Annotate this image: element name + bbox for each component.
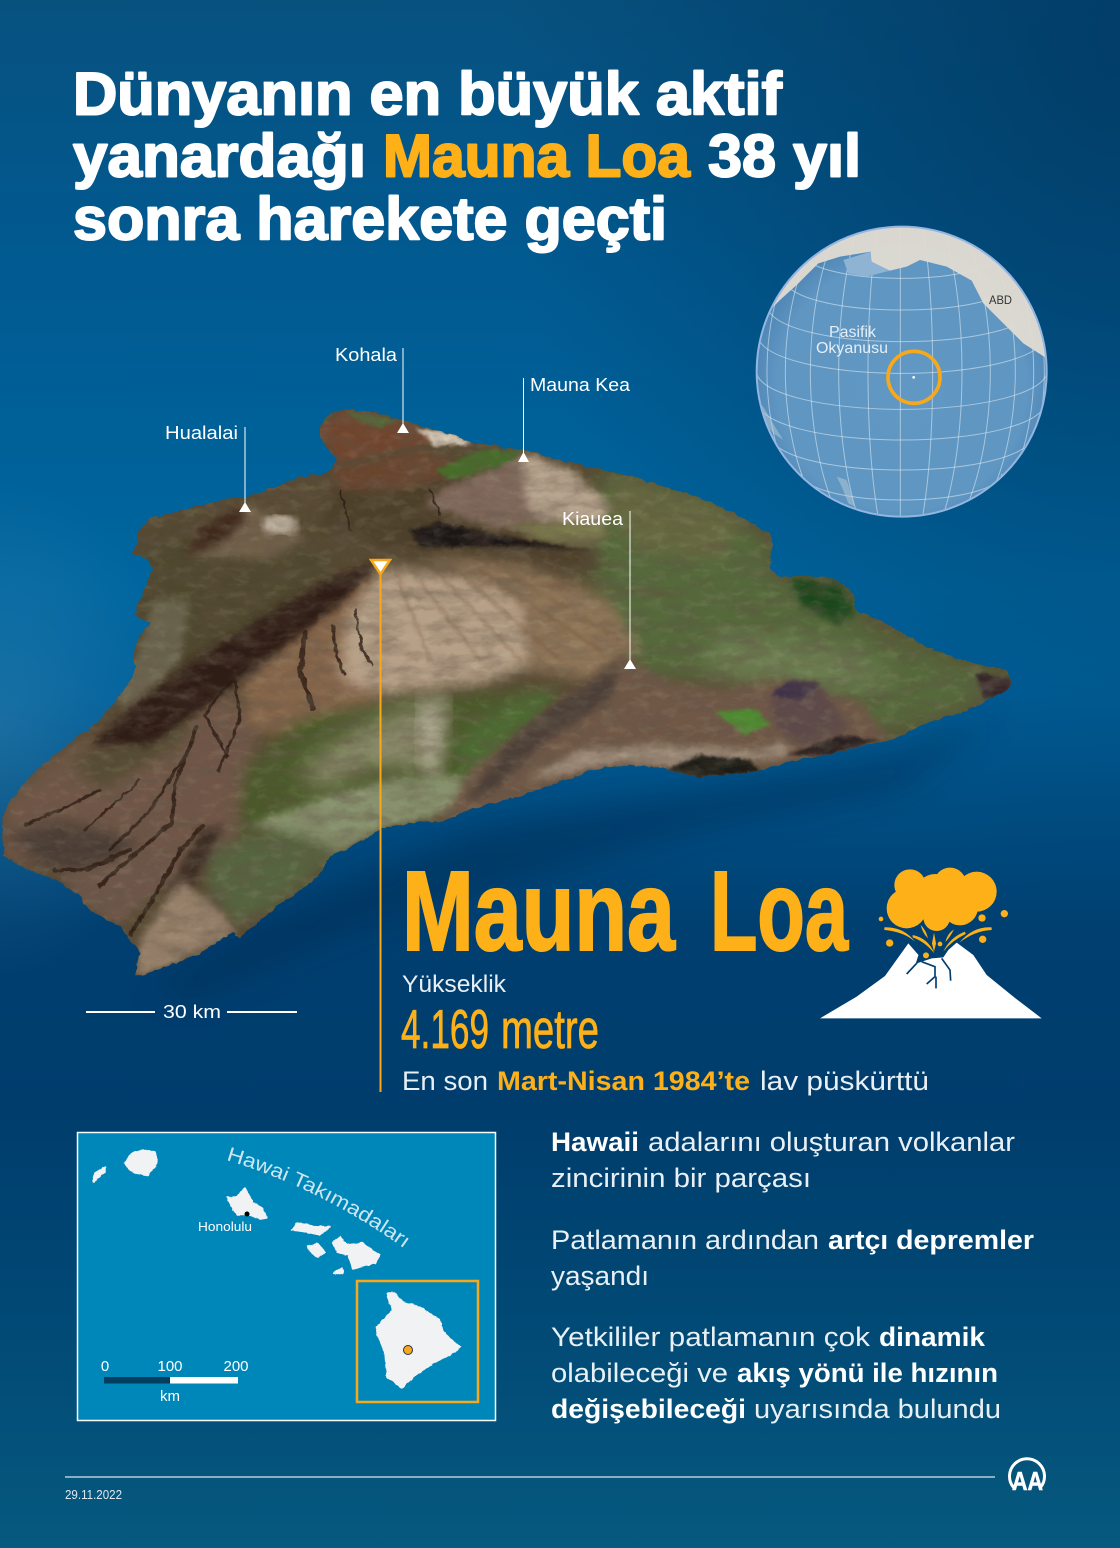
saddle plateau xyxy=(324,480,600,573)
Big Island highlight box xyxy=(357,1281,478,1402)
date: 29.11.2022 xyxy=(65,1488,122,1502)
title: 38 yıl xyxy=(708,122,861,190)
heading: Mauna Loa: Loa xyxy=(710,848,849,974)
dark rainforest xyxy=(790,578,855,625)
last eruption text: lav püskürttü xyxy=(760,1066,929,1096)
title: Dünyanın en büyük aktif xyxy=(73,60,783,128)
label: ABD: ABD xyxy=(989,295,1012,307)
title xyxy=(73,60,861,252)
height value: 4.169 xyxy=(401,998,489,1060)
title: sonra harekete geçti xyxy=(73,186,667,252)
map scale bar: km xyxy=(160,1388,180,1405)
text block: official warning: akış yönü ile hızının xyxy=(737,1358,998,1388)
text block: official warning: değişebileceği xyxy=(551,1394,746,1424)
south tip pale slope xyxy=(135,880,235,977)
height value xyxy=(401,998,599,1060)
scale: 30 km: 30 km xyxy=(163,1002,221,1022)
text block: Hawaii chain: Hawaii xyxy=(551,1127,639,1157)
text block: Hawaii chain: zincirinin bir parçası xyxy=(551,1163,811,1193)
Mauna Kea cone xyxy=(425,452,540,530)
text block: aftershocks xyxy=(551,1225,1035,1291)
height value: metre xyxy=(501,998,599,1060)
3D terrain of Hawaii island xyxy=(2,408,1012,976)
label: Pasifik Okyanusu: Okyanusu xyxy=(816,340,888,357)
label: Pasifik Okyanusu: Pasifik xyxy=(829,324,877,341)
land: southwest Pacific xyxy=(762,406,854,506)
Kohala peninsula xyxy=(318,408,440,462)
map scale bar: 100 xyxy=(157,1358,183,1375)
north olive band xyxy=(600,478,740,560)
northern greenery xyxy=(435,450,525,480)
volcano marker: Mauna Kea: Mauna Kea xyxy=(530,375,631,395)
text block: aftershocks: artçı depremler xyxy=(828,1225,1035,1255)
drifting clouds xyxy=(300,700,445,790)
label: Pasifik Okyanusu xyxy=(816,324,888,357)
Bering Sea shelf xyxy=(843,252,890,277)
Mauna Loa marker and leader line xyxy=(371,560,390,1092)
last eruption text xyxy=(402,1066,929,1096)
pale pastures xyxy=(700,630,900,690)
Honolulu: Honolulu xyxy=(198,1220,252,1234)
title: yanardağı xyxy=(73,122,366,190)
logo: AA: AA xyxy=(1012,1466,1043,1496)
text block: official warning xyxy=(551,1322,1001,1424)
map scale bar xyxy=(101,1358,249,1405)
volcano marker: Kohala: Kohala xyxy=(335,345,398,365)
text block: Hawaii chain: adalarını oluşturan volkanlar xyxy=(648,1127,1015,1157)
Mauna Loa summit dome xyxy=(340,568,540,695)
saddle dark lava crack xyxy=(410,522,590,550)
text block: official warning: Yetkililer patlamanın çok xyxy=(551,1322,871,1352)
upper east flank xyxy=(420,555,640,680)
last eruption text: En son xyxy=(402,1066,488,1096)
title: Mauna Loa xyxy=(383,122,691,190)
text block: official warning: uyarısında bulundu xyxy=(754,1394,1001,1424)
volcano marker: Kohala xyxy=(335,345,409,433)
dark band from summit xyxy=(90,560,382,745)
footer rule xyxy=(65,1476,995,1478)
text block: official warning: dinamik xyxy=(879,1322,986,1352)
volcano marker: Kiauea xyxy=(562,509,636,669)
icon: erupting volcano xyxy=(820,868,1042,1018)
text block: Hawaii chain xyxy=(551,1127,1015,1193)
text block: aftershocks: Patlamanın ardından xyxy=(551,1225,819,1255)
Hawaii dot xyxy=(912,376,915,379)
text block: aftershocks: yaşandı xyxy=(551,1261,649,1291)
map scale bar: 0 xyxy=(101,1358,109,1375)
Honolulu xyxy=(198,1212,252,1234)
graticule xyxy=(758,254,1046,516)
west coast grey patches xyxy=(115,600,190,715)
terrain texture xyxy=(0,0,1120,1000)
map scale bar: 200 xyxy=(223,1358,249,1375)
west slope olive xyxy=(132,528,330,664)
Hualalai cone xyxy=(190,503,305,560)
Kilauea southern rift xyxy=(440,655,890,825)
text block: official warning: olabileceği ve xyxy=(551,1358,728,1388)
heading: Mauna Loa: Mauna xyxy=(402,848,676,974)
location ring xyxy=(888,351,940,403)
volcano marker: Mauna Kea xyxy=(518,375,631,462)
label: Yükseklik: Yükseklik xyxy=(402,971,507,998)
northern rust xyxy=(330,450,470,490)
lava flow streaks xyxy=(25,490,440,934)
south tip farmland xyxy=(205,830,340,925)
islands xyxy=(93,1150,460,1388)
south-west slope xyxy=(0,690,260,880)
land: North Pacific rim xyxy=(772,228,1045,358)
mid green slope xyxy=(240,690,530,840)
flank ray streaks xyxy=(395,565,680,660)
logo: AA xyxy=(1010,1459,1044,1496)
last eruption text: Mart-Nisan 1984’te xyxy=(497,1066,750,1096)
inset map: Hawaiian Islands xyxy=(76,1132,496,1422)
globe locator map xyxy=(756,226,1048,518)
Mauna Loa location dot xyxy=(404,1346,412,1354)
volcano marker: Hualalai xyxy=(165,423,251,512)
volcano marker: Hualalai: Hualalai xyxy=(165,423,238,443)
north-east green slope xyxy=(590,470,1012,740)
volcano marker: Kiauea: Kiauea xyxy=(562,509,624,529)
island shadow xyxy=(150,715,1000,1000)
archipelago label: Hawai Takımadaları xyxy=(228,1147,409,1248)
south coast pastures xyxy=(250,775,480,857)
central flank xyxy=(240,575,385,740)
